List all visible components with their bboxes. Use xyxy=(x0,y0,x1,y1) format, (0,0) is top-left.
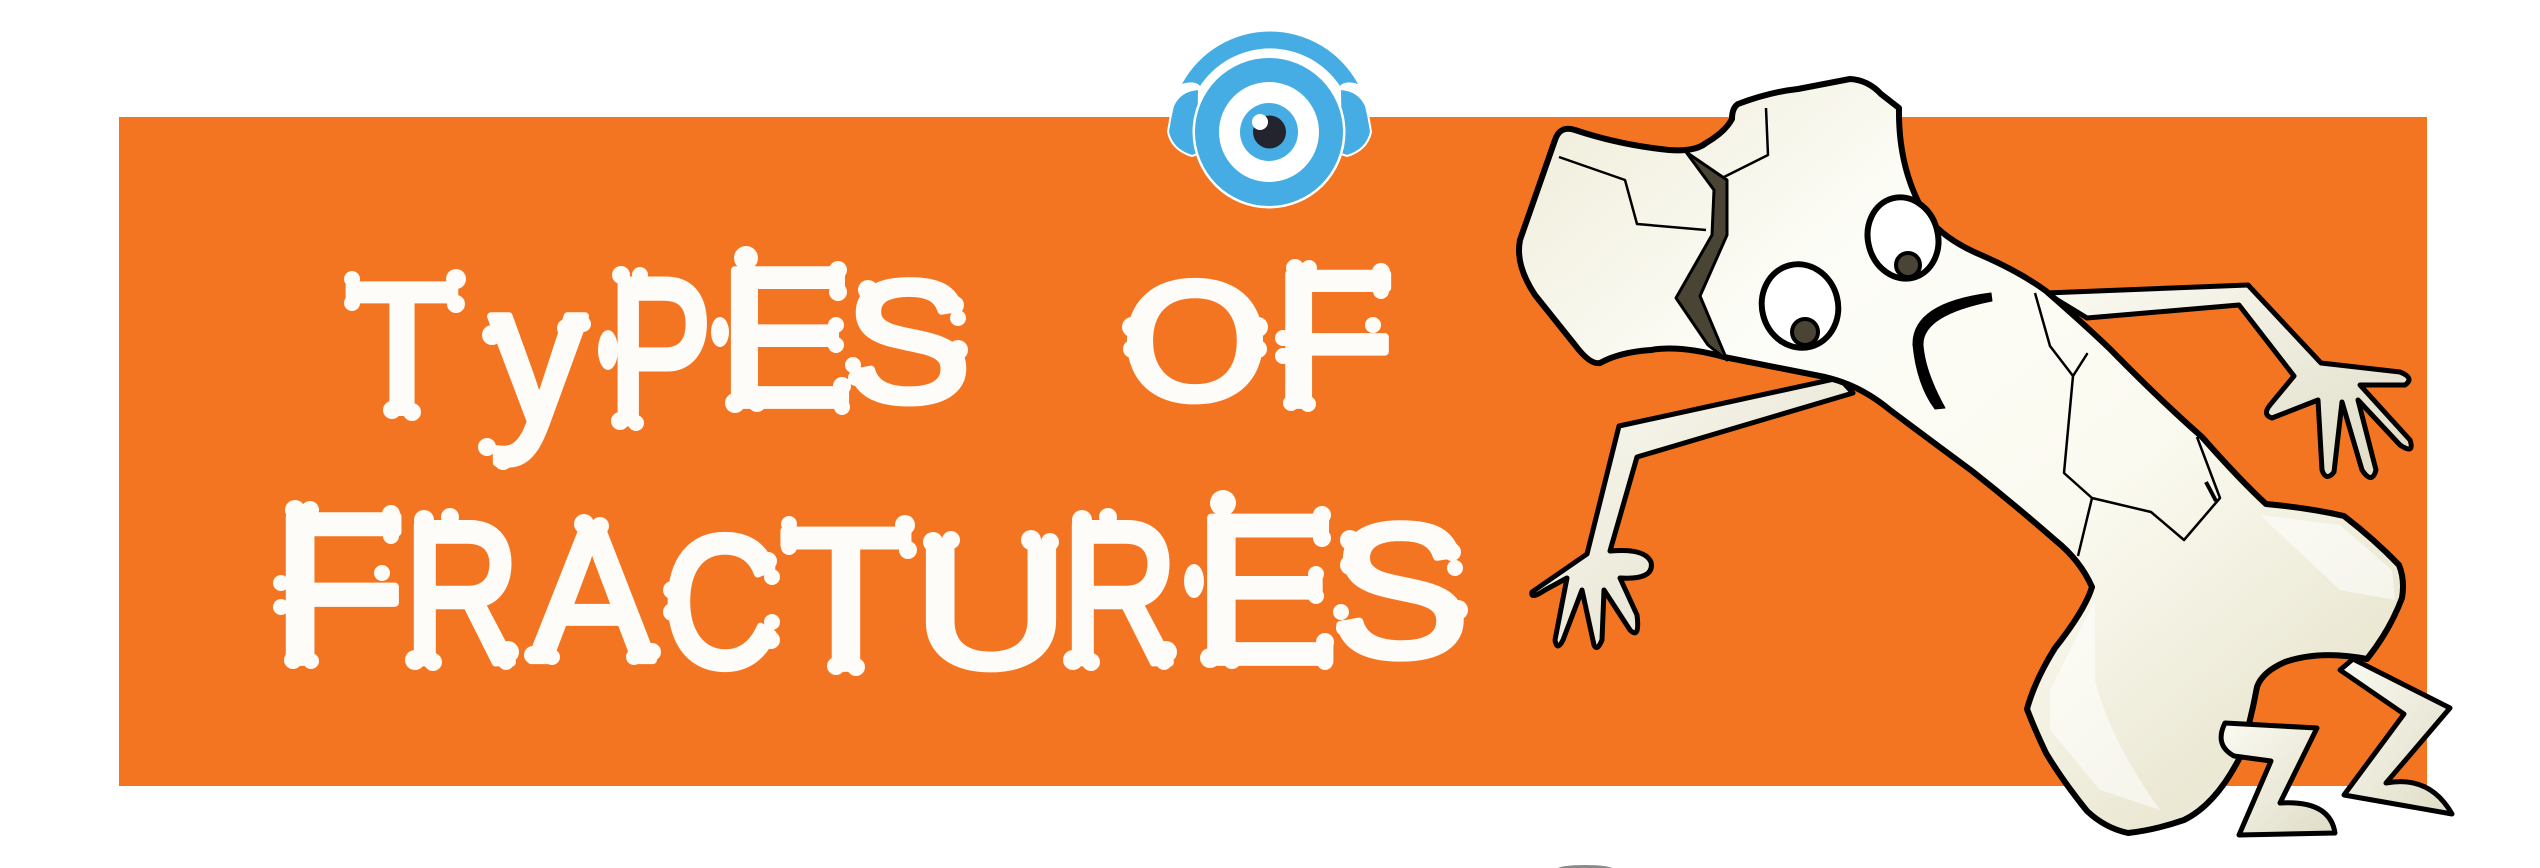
title line 2: Fractures xyxy=(272,470,1469,711)
left arm xyxy=(1532,378,1853,648)
title line 1: Types of: O xyxy=(1122,247,1268,435)
right eye xyxy=(1859,189,1947,287)
logo right ear cup xyxy=(1340,89,1371,156)
title line 1: Types of: S xyxy=(845,246,971,438)
title line 2: Fractures: A xyxy=(531,488,654,701)
title line 2: Fractures: C xyxy=(663,498,779,706)
logo eye rings xyxy=(1192,56,1346,208)
back leg xyxy=(2340,659,2452,814)
right arm xyxy=(2046,285,2411,478)
sad mouth xyxy=(1913,293,1992,409)
logo headband xyxy=(1182,31,1358,86)
title line 2: Fractures: R xyxy=(404,482,520,705)
thin cracks xyxy=(1559,108,2220,556)
title line 1: Types of: T xyxy=(345,246,459,452)
character: sad fractured bone xyxy=(1519,79,2452,835)
title line 2: Fractures: S xyxy=(1331,486,1469,697)
title line 1: Types of: y xyxy=(491,242,586,465)
logo left ear cup xyxy=(1168,89,1199,156)
title line 1: Types of: F xyxy=(1273,233,1395,446)
bone body xyxy=(1519,79,2403,833)
left eye xyxy=(1752,256,1848,356)
bone highlights xyxy=(2050,515,2395,810)
title line 2: Fractures: U xyxy=(914,505,1068,705)
title line 2: Fractures: F xyxy=(272,470,406,707)
title line 1: Types of: E xyxy=(718,228,854,447)
orange banner panel xyxy=(119,117,2427,786)
title line 2: Fractures: R xyxy=(1062,482,1178,705)
title line 2: Fractures: T xyxy=(780,488,912,711)
front leg xyxy=(2221,723,2335,835)
title line 1: Types of xyxy=(344,228,1395,470)
title line 2: Fractures: E xyxy=(1193,473,1339,707)
title: Types of Fractures xyxy=(272,228,1469,711)
main dark crack xyxy=(1676,152,1727,360)
title line 1: Types of: P xyxy=(608,236,712,466)
icon: headphone eye logo xyxy=(1168,31,1371,209)
partial grey shape at bottom edge xyxy=(1557,865,1613,868)
